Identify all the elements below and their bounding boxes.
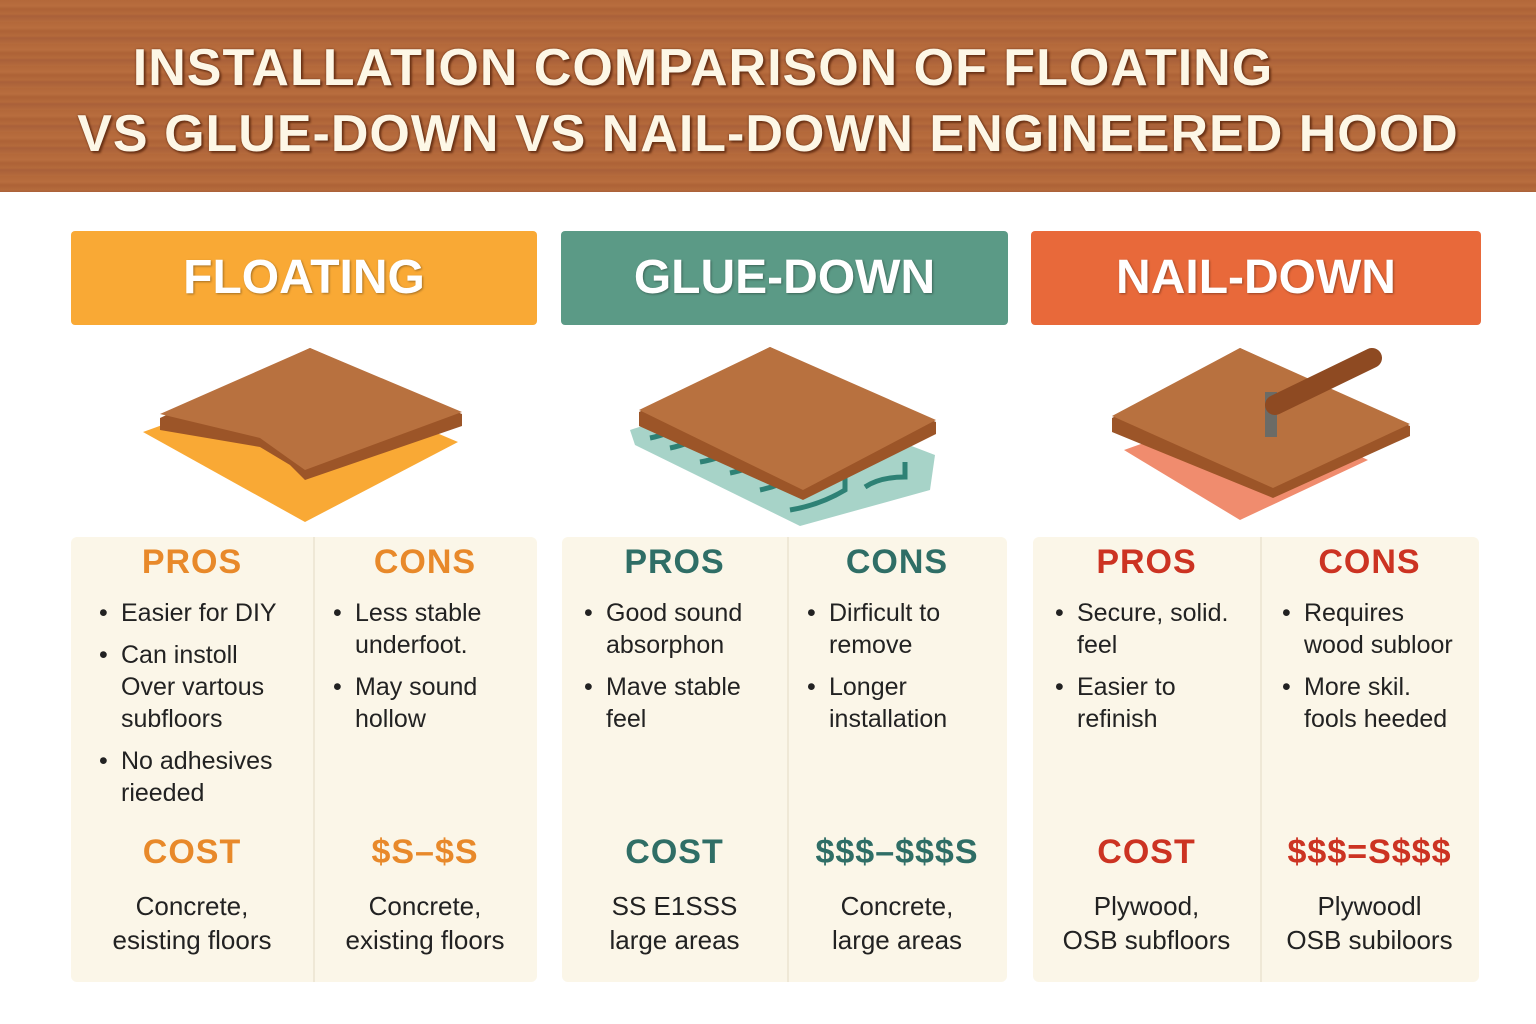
glue pros: feel	[606, 705, 646, 733]
nail pros	[1056, 543, 1230, 955]
glue cons: large areas	[832, 925, 962, 955]
header: glue-down	[561, 231, 1008, 325]
glue cons: $$$–$$$S	[815, 833, 979, 871]
title line 1: INSTALLATION COMPARISON OF FLOATING	[133, 39, 1273, 97]
nail pros: OSB subfloors	[1063, 925, 1230, 955]
glue cons: installation	[829, 705, 947, 733]
floating cons: Less stable	[355, 599, 481, 627]
glue cons: Concrete,	[841, 891, 953, 921]
glue cons: Longer	[829, 673, 907, 701]
nail cons: More skil.	[1304, 673, 1411, 701]
panel: nail-down	[1033, 537, 1479, 982]
header: nail-down	[1031, 231, 1481, 325]
nail pros: Easier to	[1077, 673, 1176, 701]
floating pros: COST	[143, 833, 241, 871]
floating cons	[334, 543, 504, 955]
floating pros: Can instoll	[121, 641, 238, 669]
floating cons: $S–$S	[371, 833, 479, 871]
floating pros: rieeded	[121, 779, 204, 807]
glue cons: Dirficult to	[829, 599, 940, 627]
panel: floating	[71, 537, 537, 982]
glue pros: large areas	[609, 925, 740, 955]
nail cons: $$$=S$$$	[1288, 833, 1452, 871]
floating pros: No adhesives	[121, 747, 272, 775]
icon: floating board	[143, 348, 462, 522]
glue pros: PROS	[624, 543, 725, 581]
floating pros: Concrete,	[136, 891, 248, 921]
glue pros: SS E1SSS	[612, 891, 737, 921]
icon: glue-down board	[630, 347, 936, 526]
nail pros: refinish	[1077, 705, 1158, 733]
nail cons: wood subloor	[1304, 631, 1453, 659]
nail pros: COST	[1097, 833, 1196, 871]
floating cons: CONS	[374, 543, 476, 581]
floating cons: underfoot.	[355, 631, 468, 659]
nail cons	[1283, 543, 1453, 955]
nail pros: PROS	[1096, 543, 1197, 581]
floating cons: May sound	[355, 673, 477, 701]
header: floating: FLOATING	[183, 251, 425, 304]
panel: glue-down	[562, 537, 1007, 982]
nail cons: Requires	[1304, 599, 1404, 627]
floating pros: PROS	[142, 543, 242, 581]
nail pros: Plywood,	[1094, 891, 1199, 921]
icon: nail-down board with hammer	[1112, 348, 1410, 520]
nail pros: feel	[1077, 631, 1117, 659]
floating cons: Concrete,	[369, 891, 481, 921]
header: glue-down: GLUE-DOWN	[634, 251, 935, 304]
glue cons: CONS	[846, 543, 948, 581]
glue pros: Good sound	[606, 599, 742, 627]
header: nail-down: NAIL-DOWN	[1116, 251, 1396, 304]
floating cons: hollow	[355, 705, 426, 733]
header: floating	[71, 231, 537, 325]
floating pros: Over vartous	[121, 673, 264, 701]
nail cons: Plywoodl	[1317, 891, 1422, 921]
title line 2: VS GLUE-DOWN VS NAIL-DOWN ENGINEERED HOOD	[77, 105, 1459, 163]
glue pros: absorphon	[606, 631, 724, 659]
floating pros	[100, 543, 277, 955]
nail pros: Secure, solid.	[1077, 599, 1228, 627]
floating cons: existing floors	[346, 925, 504, 955]
nail cons: OSB subiloors	[1286, 925, 1453, 955]
nail cons: CONS	[1318, 543, 1421, 581]
glue cons	[808, 543, 979, 955]
glue pros: Mave stable	[606, 673, 741, 701]
glue cons: remove	[829, 631, 912, 659]
floating pros: Easier for DIY	[121, 599, 277, 627]
glue pros: COST	[625, 833, 724, 871]
floating pros: esisting floors	[113, 925, 271, 955]
floating pros: subfloors	[121, 705, 222, 733]
glue pros	[585, 543, 742, 955]
illustrations	[143, 347, 1410, 526]
title banner	[0, 0, 1536, 192]
nail cons: fools heeded	[1304, 705, 1447, 733]
